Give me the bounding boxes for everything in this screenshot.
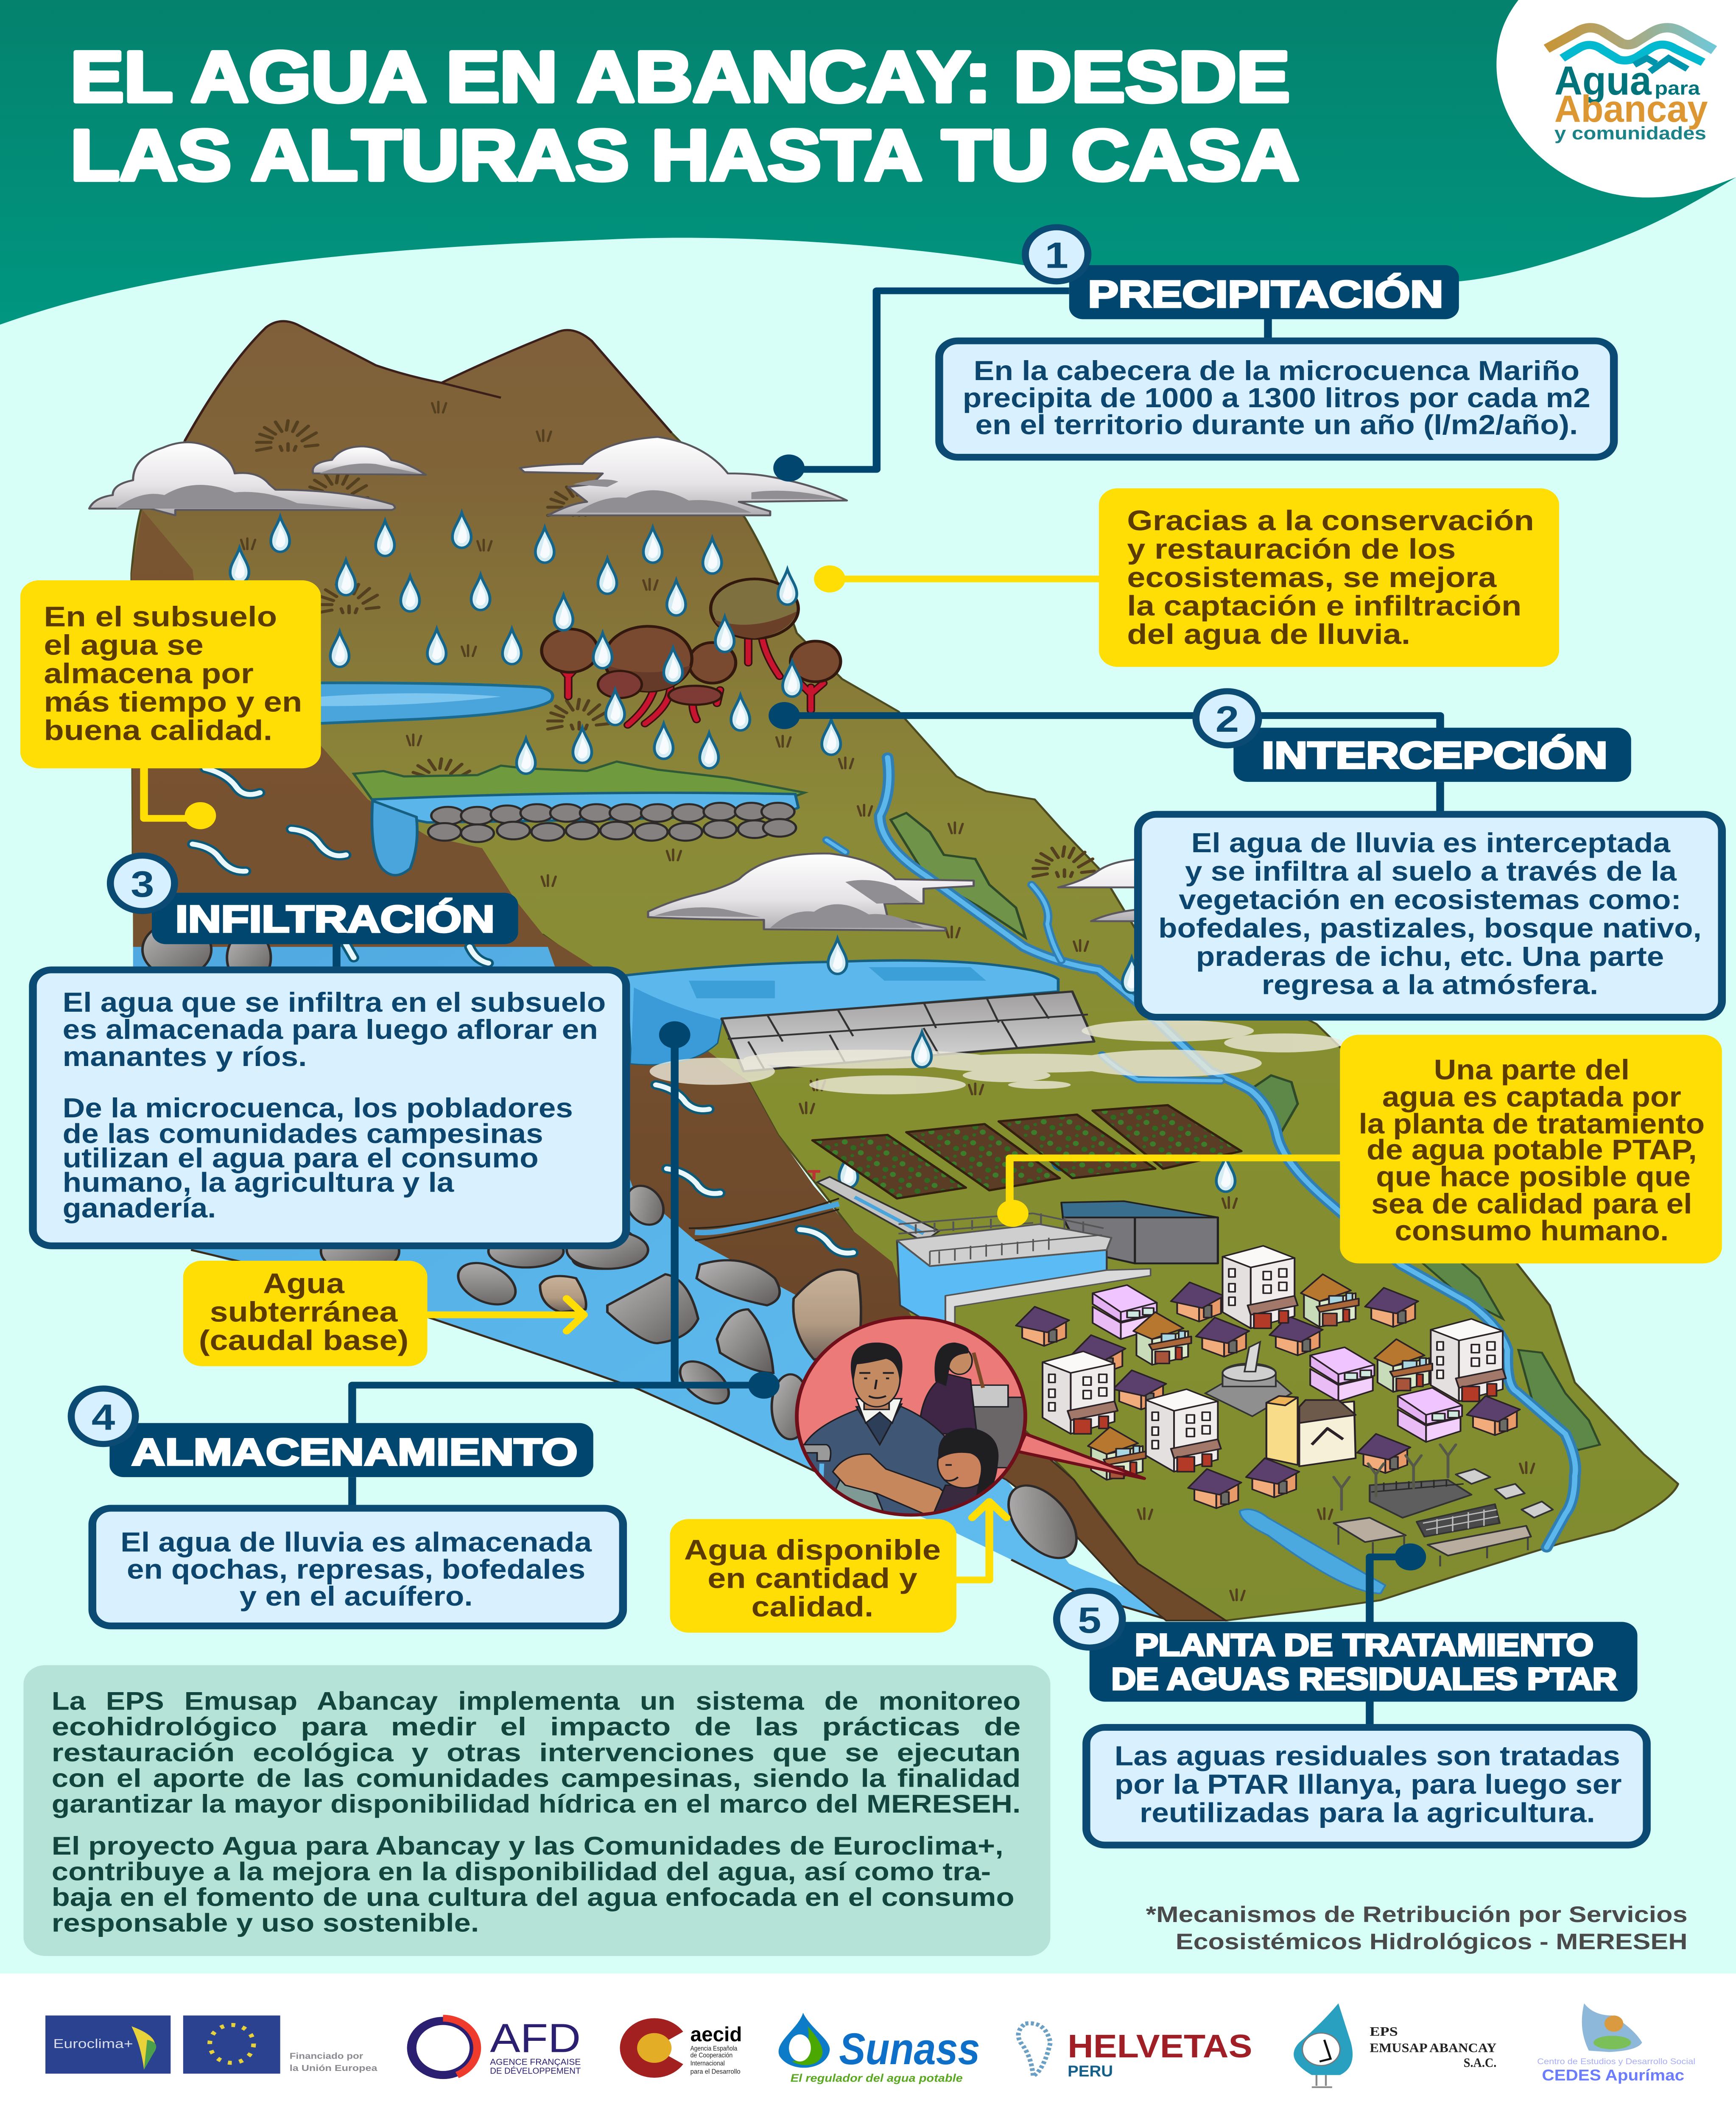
heading: 3 infiltración xyxy=(110,856,518,944)
footnote xyxy=(1146,1902,1688,1954)
logo: Unión Europea xyxy=(183,2015,377,2073)
heading: 4 almacenamiento: ALMACENAMIENTO xyxy=(131,1431,578,1473)
logo: EPS Emusap Abancay: S.A.C. xyxy=(1464,2056,1496,2070)
logo: Helvetas: PERU xyxy=(1068,2062,1113,2080)
callout: conservation: Gracias a la conservación xyxy=(1127,505,1534,537)
logo: EPS Emusap Abancay: EPS xyxy=(1370,2025,1398,2039)
panel: infiltración text xyxy=(33,970,626,1246)
panel: intercepción text xyxy=(1138,814,1722,1017)
heading: 2 intercepción: 2 xyxy=(1216,699,1239,740)
fog xyxy=(650,1020,1343,1094)
callout: conservation: ecosistemas, se mejora xyxy=(1127,562,1497,593)
panel: infiltración text: manantes y ríos. xyxy=(63,1041,307,1072)
panel: almacenamiento text: y en el acuífero. xyxy=(240,1581,473,1612)
dot: reservoir xyxy=(659,1021,690,1048)
logo: aecid: Agencia Española xyxy=(690,2044,738,2052)
logo: AFD: AFD xyxy=(490,2015,581,2061)
title: EL AGUA EN ABANCAY: DESDE xyxy=(70,37,1290,117)
woman cooking xyxy=(919,1374,977,1434)
footnote: Ecosistémicos Hidrológicos - MERESEH xyxy=(1176,1929,1688,1954)
logo: Agua para Abancay: Abancay xyxy=(1554,88,1708,130)
logo: Sunass: Sunass xyxy=(839,2024,980,2074)
cloud 2 xyxy=(313,446,426,475)
arrow: available water xyxy=(956,1502,1006,1580)
farm plots xyxy=(812,1105,1241,1198)
connector: reservoir to almacenamiento xyxy=(352,1035,764,1426)
panel: precipitación text: En la cabecera de la microcuenca Mariño xyxy=(974,355,1579,386)
heading: 1 precipitación xyxy=(1025,227,1459,319)
callout: PTAP xyxy=(1340,1035,1722,1263)
brown bank strip xyxy=(955,1407,1226,1620)
title: LAS ALTURAS HASTA TU CASA xyxy=(70,115,1299,195)
man: arm and hands xyxy=(833,1454,958,1520)
logo: Euroclima: Euroclima+ xyxy=(53,2036,133,2051)
panel: precipitación text xyxy=(939,341,1614,457)
heading: 5 PTAR: PLANTA DE TRATAMIENTO xyxy=(1135,1627,1593,1662)
panel: intercepción text: praderas de ichu, etc. Una parte xyxy=(1196,941,1664,972)
callout: available water: Agua disponible xyxy=(684,1534,941,1566)
callout: conservation: y restauración de los xyxy=(1127,533,1456,565)
logo: EPS Emusap Abancay xyxy=(1294,2003,1497,2087)
reservoir lake xyxy=(626,960,1058,1064)
logo: CEDES Apurímac: CEDES Apurímac xyxy=(1542,2067,1684,2084)
logo: CEDES Apurímac xyxy=(1537,2003,1695,2084)
panel: infiltración text: es almacenada para luego aflorar en xyxy=(63,1014,598,1045)
garment xyxy=(822,1475,892,1535)
footnote: *Mecanismos de Retribución por Servicios xyxy=(1146,1902,1688,1927)
panel: monitoring and project note: con el aporte de las comunidades campesinas, siendo la finalidad xyxy=(52,1764,1020,1792)
logo: CEDES Apurímac: Centro de Estudios y Desarrollo Social xyxy=(1537,2057,1695,2066)
panel: PTAR text: reutilizadas para la agricultura. xyxy=(1140,1797,1595,1828)
header wave xyxy=(0,0,1736,325)
logo: aecid: aecid xyxy=(690,2023,742,2045)
panel: intercepción text: regresa a la atmósfera. xyxy=(1262,969,1598,1000)
callout: PTAP: la planta de tratamiento xyxy=(1359,1108,1705,1140)
callout: available water: calidad. xyxy=(752,1591,873,1623)
dam xyxy=(721,991,1094,1072)
drop on lake xyxy=(828,939,847,974)
connector: intercepción to box xyxy=(1439,782,1441,817)
other drops xyxy=(839,958,1235,1192)
panel: monitoring and project note: ecohidrológico para medir el impacto de las prácticas de xyxy=(52,1712,1020,1741)
connector: almacenamiento to box xyxy=(351,1477,353,1511)
logo: aecid: de Cooperación xyxy=(690,2051,732,2059)
logo: Agua para Abancay xyxy=(1496,0,1736,198)
stream into river xyxy=(695,1204,839,1233)
callout: subsoil: buena calidad. xyxy=(44,714,272,746)
heading: 1 precipitación: 1 xyxy=(1045,235,1068,276)
wastewater plant PTAR xyxy=(1240,1445,1553,1593)
callout: PTAP: consumo humano. xyxy=(1395,1215,1669,1247)
logo: Agua para Abancay: Agua xyxy=(1554,58,1652,104)
panel: PTAR text: Las aguas residuales son tratadas xyxy=(1115,1740,1620,1771)
cloud 4 xyxy=(648,853,974,931)
panel: infiltración text: de las comunidades campesinas xyxy=(63,1118,543,1149)
callout: subsoil: almacena por xyxy=(44,658,254,689)
panel: infiltración text: humano, la agricultura y la xyxy=(63,1167,454,1198)
panel: intercepción text: bofedales, pastizales, bosque nativo, xyxy=(1158,912,1702,943)
callout: subsoil: más tiempo y en xyxy=(44,686,302,718)
connector: precipitación to box xyxy=(1267,319,1269,341)
panel: almacenamiento text: El agua de lluvia es almacenada xyxy=(120,1526,592,1557)
lake upper (bofedal) xyxy=(282,683,553,725)
panel: monitoring and project note: contribuye a la mejora en la disponibilidad del agua, así como tra- xyxy=(52,1857,991,1886)
panel: monitoring and project note: restauración ecológica y otras intervenciones que se ejecutan xyxy=(52,1738,1020,1767)
panel: monitoring and project note xyxy=(23,1665,1050,1956)
logo: Sunass: El regulador del agua potable xyxy=(791,2072,963,2084)
heading: 5 PTAR: DE AGUAS RESIDUALES PTAR xyxy=(1111,1661,1617,1696)
callout: PTAP: de agua potable PTAP, xyxy=(1367,1134,1697,1166)
dot: subsoil callout xyxy=(185,802,216,829)
riparian vegetation xyxy=(891,813,1025,937)
heading: 1 precipitación: PRECIPITACIÓN xyxy=(1088,273,1443,315)
panel: intercepción text: El agua de lluvia es interceptada xyxy=(1191,827,1671,858)
main river, upper stretch xyxy=(827,758,1575,1547)
panel: almacenamiento text: en qochas, represas, bofedales xyxy=(127,1553,585,1584)
grass tufts xyxy=(241,402,1534,1600)
logo: Helvetas xyxy=(1018,2023,1252,2080)
logo: Agua para Abancay: para xyxy=(1655,78,1700,99)
logo: Euroclima xyxy=(45,2015,171,2073)
connector: PTAR to box xyxy=(1369,1701,1371,1730)
callout circle: community using water xyxy=(795,1318,1144,1535)
water treatment plant PTAP xyxy=(808,1171,1218,1332)
logo: Helvetas: HELVETAS xyxy=(1068,2028,1252,2065)
arrow: groundwater xyxy=(428,1298,584,1331)
dot: aquifer xyxy=(748,1371,780,1399)
cloud 1 xyxy=(89,442,395,515)
footer band xyxy=(0,1973,1736,2121)
wavy infiltration arrows xyxy=(193,768,853,1253)
callout: PTAP: sea de calidad para el xyxy=(1371,1188,1692,1220)
cloud 5 xyxy=(1058,859,1143,921)
callout: groundwater xyxy=(183,1261,428,1366)
village xyxy=(1016,1246,1520,1508)
river lower bank line xyxy=(191,1250,1166,1619)
rain drops xyxy=(230,513,841,774)
logo: EPS Emusap Abancay: EMUSAP ABANCAY xyxy=(1370,2041,1497,2055)
illustration: landscape xyxy=(89,321,1678,1620)
callout: PTAP: que hace posible que xyxy=(1376,1161,1691,1192)
dot: intercepción xyxy=(769,702,800,729)
callout: groundwater: Agua xyxy=(263,1268,345,1299)
callout: subsoil: En el subsuelo xyxy=(44,601,277,632)
panel: monitoring and project note: El proyecto Agua para Abancay y las Comunidades de Euroclima+, xyxy=(52,1831,1004,1860)
panel: infiltración text: utilizan el agua para el consumo xyxy=(63,1142,539,1173)
groundwater river xyxy=(133,933,1226,1620)
connector: intercepción xyxy=(791,716,1440,730)
heading: 3 infiltración: INFILTRACIÓN xyxy=(175,898,495,940)
tank xyxy=(897,1240,1107,1332)
faucet and water xyxy=(795,1445,831,1461)
land: mountain and valley xyxy=(131,321,1678,1620)
logo: aecid xyxy=(620,2018,742,2078)
logo: Agua para Abancay: y comunidades xyxy=(1554,123,1706,143)
callout: subsoil: el agua se xyxy=(44,629,204,661)
rocks in river xyxy=(143,923,1090,1568)
man: sweater xyxy=(802,1407,958,1528)
panel: PTAR text xyxy=(1086,1727,1647,1845)
dot: conservation callout xyxy=(814,565,845,593)
cloud 3 xyxy=(520,437,847,515)
panel: monitoring and project note: responsable y uso sostenible. xyxy=(52,1908,479,1937)
panel: intercepción text: y se infiltra al suelo a través de la xyxy=(1185,856,1677,887)
heading: 4 almacenamiento: 4 xyxy=(92,1397,115,1438)
panel: monitoring and project note: baja en el fomento de una cultura del agua enfocada en el consumo xyxy=(52,1883,1015,1911)
connector: PTAR xyxy=(1370,1557,1410,1625)
dot: PTAR xyxy=(1395,1543,1426,1570)
connector: infiltración to box xyxy=(335,944,338,971)
logo: aecid: para el Desarrollo xyxy=(690,2068,741,2075)
callout: groundwater: (caudal base) xyxy=(199,1324,408,1356)
logo: AFD: DE DÉVELOPPEMENT xyxy=(490,2066,581,2076)
title xyxy=(70,37,1299,195)
callout: available water xyxy=(670,1519,956,1633)
panel: PTAR text: por la PTAR Illanya, para luego ser xyxy=(1115,1768,1622,1799)
wetland with stone wall and waterfall xyxy=(354,761,805,875)
connector: precipitación xyxy=(791,291,1069,470)
stove and pot xyxy=(970,1397,1027,1468)
heading: 4 almacenamiento xyxy=(71,1388,593,1477)
callout: conservation xyxy=(1099,488,1559,667)
logo: Unión Europea: la Unión Europea xyxy=(290,2063,377,2073)
dot: PTAP callout xyxy=(997,1200,1029,1227)
heading: 5 PTAR: 5 xyxy=(1078,1600,1101,1640)
panel: infiltración text: El agua que se infiltra en el subsuelo xyxy=(63,987,606,1018)
callout: conservation: del agua de lluvia. xyxy=(1127,618,1410,650)
callout: conservation: la captación e infiltración xyxy=(1127,590,1521,622)
connector: subsoil callout xyxy=(144,768,200,818)
panel: infiltración text: De la microcuenca, los pobladores xyxy=(63,1092,573,1123)
panel: monitoring and project note: La EPS Emusap Abancay implementa un sistema de monitoreo xyxy=(52,1687,1020,1715)
man: head xyxy=(864,1393,889,1410)
heading: 2 intercepción xyxy=(1196,691,1631,782)
monument xyxy=(1205,1342,1292,1416)
callout: subsoil xyxy=(20,580,321,768)
connector: conservation callout xyxy=(830,578,1099,580)
heading: 5 PTAR xyxy=(1057,1591,1637,1701)
callout: PTAP: Una parte del xyxy=(1434,1054,1630,1086)
logo: aecid: Internacional xyxy=(690,2059,725,2067)
callout: PTAP: agua es captada por xyxy=(1382,1081,1681,1113)
logo: AFD xyxy=(412,2015,581,2076)
panel: monitoring and project note: garantizar la mayor disponibilidad hídrica en el marco del MERESEH. xyxy=(52,1789,1020,1818)
girl xyxy=(933,1485,1018,1522)
callout: groundwater: subterránea xyxy=(210,1296,398,1328)
panel: intercepción text: vegetación en ecosistemas como: xyxy=(1179,884,1681,915)
mountain ridge line xyxy=(185,321,671,441)
heading: 3 infiltración: 3 xyxy=(131,864,154,905)
panel: precipitación text: en el territorio durante un año (l/m2/año). xyxy=(975,409,1578,440)
shed xyxy=(1063,1217,1218,1263)
forest trees xyxy=(542,579,841,725)
dot: precipitación xyxy=(773,454,805,481)
church xyxy=(1266,1396,1356,1466)
panel: infiltración text: ganadería. xyxy=(63,1192,216,1223)
logo: AFD: AGENCE FRANÇAISE xyxy=(490,2057,581,2067)
brown subsoil xyxy=(131,510,939,1366)
callout: available water: en cantidad y xyxy=(707,1563,917,1594)
logo: Unión Europea: Financiado por xyxy=(290,2051,363,2061)
intake channel xyxy=(817,1177,939,1242)
panel: precipitación text: precipita de 1000 a 1300 litros por cada m2 xyxy=(963,382,1591,413)
connector: PTAP callout xyxy=(1010,1158,1340,1213)
panel: almacenamiento text xyxy=(92,1508,623,1626)
heading: 2 intercepción: INTERCEPCIÓN xyxy=(1262,735,1607,777)
logo: Sunass xyxy=(779,2013,980,2084)
